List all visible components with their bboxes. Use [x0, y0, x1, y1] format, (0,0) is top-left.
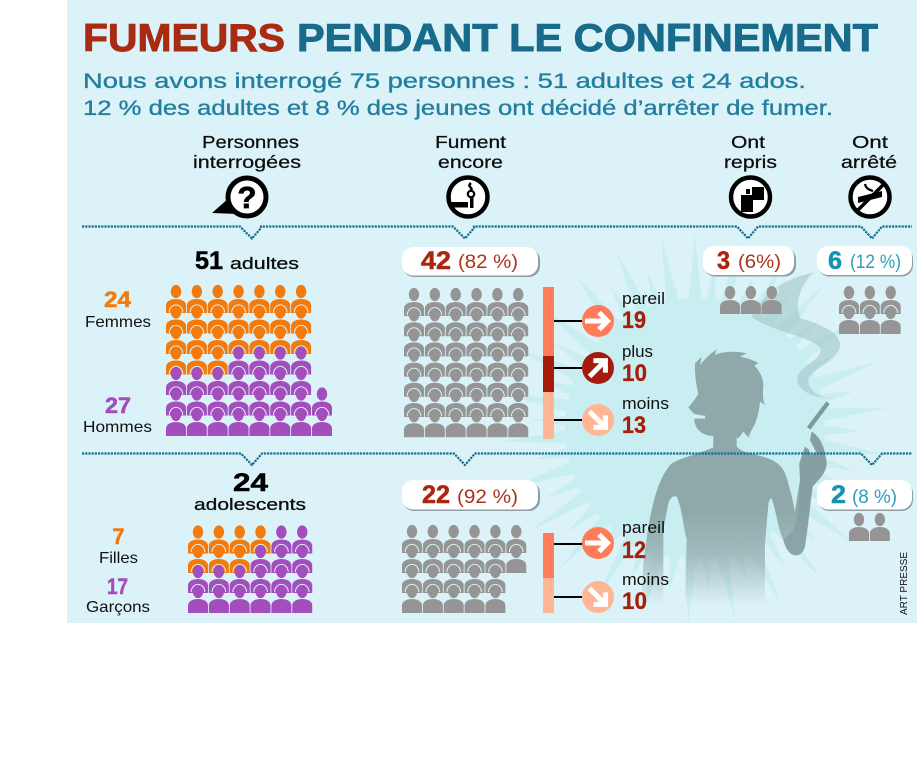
pictogram: 6 stopped	[839, 285, 901, 334]
label: 24 femmes: Femmes	[85, 314, 151, 331]
pill: 2 (8 %): 2	[831, 481, 846, 509]
teens total: 24	[233, 469, 268, 497]
sunburst behind the smoker	[500, 233, 890, 623]
callout: moins 10: 10	[622, 588, 647, 615]
infographic	[67, 0, 917, 623]
icon: question speech bubble	[212, 178, 266, 216]
label: 7 filles: 7	[112, 524, 124, 549]
callout: pareil 19: pareil	[622, 290, 665, 308]
callout: pareil 12: 12	[622, 537, 646, 564]
background panel	[67, 0, 917, 623]
pictogram: 22 still smoking	[402, 524, 526, 613]
column heading: personnes interrogées: interrogées	[193, 152, 301, 172]
callout: pareil 19: 19	[622, 307, 646, 334]
pill: 42 (82 %): (82 %)	[458, 252, 518, 273]
dotted divider: adults	[82, 226, 912, 238]
callout: plus 10	[554, 343, 653, 387]
column heading: personnes interrogées	[193, 132, 301, 172]
callout: pareil 12: pareil	[622, 519, 665, 537]
column heading: ont arrêté: arrêté	[841, 152, 897, 172]
column heading: fument encore: Fument	[435, 132, 506, 152]
column heading: ont arrêté: Ont	[852, 132, 888, 152]
pill: 3 (6%): (6%)	[738, 252, 781, 273]
column heading: ont repris: repris	[724, 152, 777, 172]
smoker silhouette	[642, 349, 828, 605]
callout: pareil 19	[554, 290, 665, 337]
label: 27 hommes: Hommes	[83, 419, 152, 436]
pictogram: 3 resumed	[720, 285, 782, 314]
column heading: fument encore: encore	[438, 152, 503, 172]
callout: moins 13: moins	[622, 395, 669, 413]
label: 17 garçons	[86, 574, 150, 616]
label: 24 femmes: 24	[104, 287, 132, 312]
label: 27 hommes: 27	[105, 393, 131, 418]
callout: moins 13: 13	[622, 412, 646, 439]
callout: plus 10: 10	[622, 360, 647, 387]
pill: 22 (92 %): (92 %)	[457, 487, 518, 508]
column heading: ont repris	[724, 132, 777, 172]
title	[83, 17, 879, 60]
intro text	[83, 70, 833, 120]
pill: 42 (82 %): 42	[421, 247, 451, 275]
column heading: fument encore	[435, 132, 506, 172]
label: 17 garçons: Garçons	[86, 599, 150, 616]
cigarette smoke	[752, 273, 840, 398]
title: FUMEURS	[83, 17, 285, 60]
callout: plus 10: plus	[622, 343, 653, 361]
teens total: adolescents	[194, 495, 306, 514]
label: 27 hommes	[83, 393, 152, 436]
dotted divider: teens	[82, 454, 912, 465]
callout: moins 10	[554, 571, 669, 615]
pictogram: 42 still smoking	[404, 287, 528, 437]
adults total: adultes	[230, 254, 299, 273]
pill: 3 (6%)	[703, 246, 796, 276]
adults total: 51	[195, 247, 223, 275]
icon: resumed smoking	[731, 178, 770, 216]
callout: moins 13	[554, 395, 669, 439]
pictogram: 24 teens	[188, 525, 312, 613]
label: 24 femmes	[85, 287, 151, 331]
pictogram: 51 adults	[166, 284, 332, 436]
label: 7 filles	[99, 524, 138, 567]
teens total	[194, 469, 306, 514]
callout: moins 10: moins	[622, 571, 669, 589]
column heading: personnes interrogées: Personnes	[202, 132, 299, 152]
icon: stopped smoking	[850, 178, 890, 216]
pictogram: 2 stopped	[849, 512, 890, 541]
pill: 22 (92 %)	[402, 480, 540, 511]
icon: lit cigarette	[448, 178, 488, 216]
pill: 2 (8 %)	[817, 480, 913, 511]
pill: 42 (82 %)	[402, 247, 540, 277]
intro text: Nous avons interrogé 75 personnes : 51 adultes et 24 ados.	[83, 70, 806, 93]
stacked bar: teens	[543, 533, 554, 613]
stacked bar: adults	[543, 287, 554, 439]
pill: 6 (12 %): (12 %)	[850, 252, 901, 273]
credit: ART PRESSE	[898, 552, 910, 615]
column heading: ont arrêté	[841, 132, 897, 172]
label: 7 filles: Filles	[99, 550, 138, 567]
callout: pareil 12	[554, 519, 665, 564]
pill: 6 (12 %)	[817, 246, 913, 276]
pill: 2 (8 %): (8 %)	[852, 487, 897, 508]
title: PENDANT LE CONFINEMENT	[297, 17, 879, 60]
pill: 6 (12 %): 6	[828, 247, 842, 275]
label: 17 garçons: 17	[107, 574, 128, 599]
icon: question speech bubble: ?	[238, 180, 256, 215]
column heading: ont repris: Ont	[731, 132, 765, 152]
adults total	[195, 247, 299, 275]
pill: 3 (6%): 3	[717, 247, 730, 275]
intro text: 12 % des adultes et 8 % des jeunes ont décidé d’arrêter de fumer.	[83, 97, 833, 120]
pill: 22 (92 %): 22	[422, 481, 450, 509]
